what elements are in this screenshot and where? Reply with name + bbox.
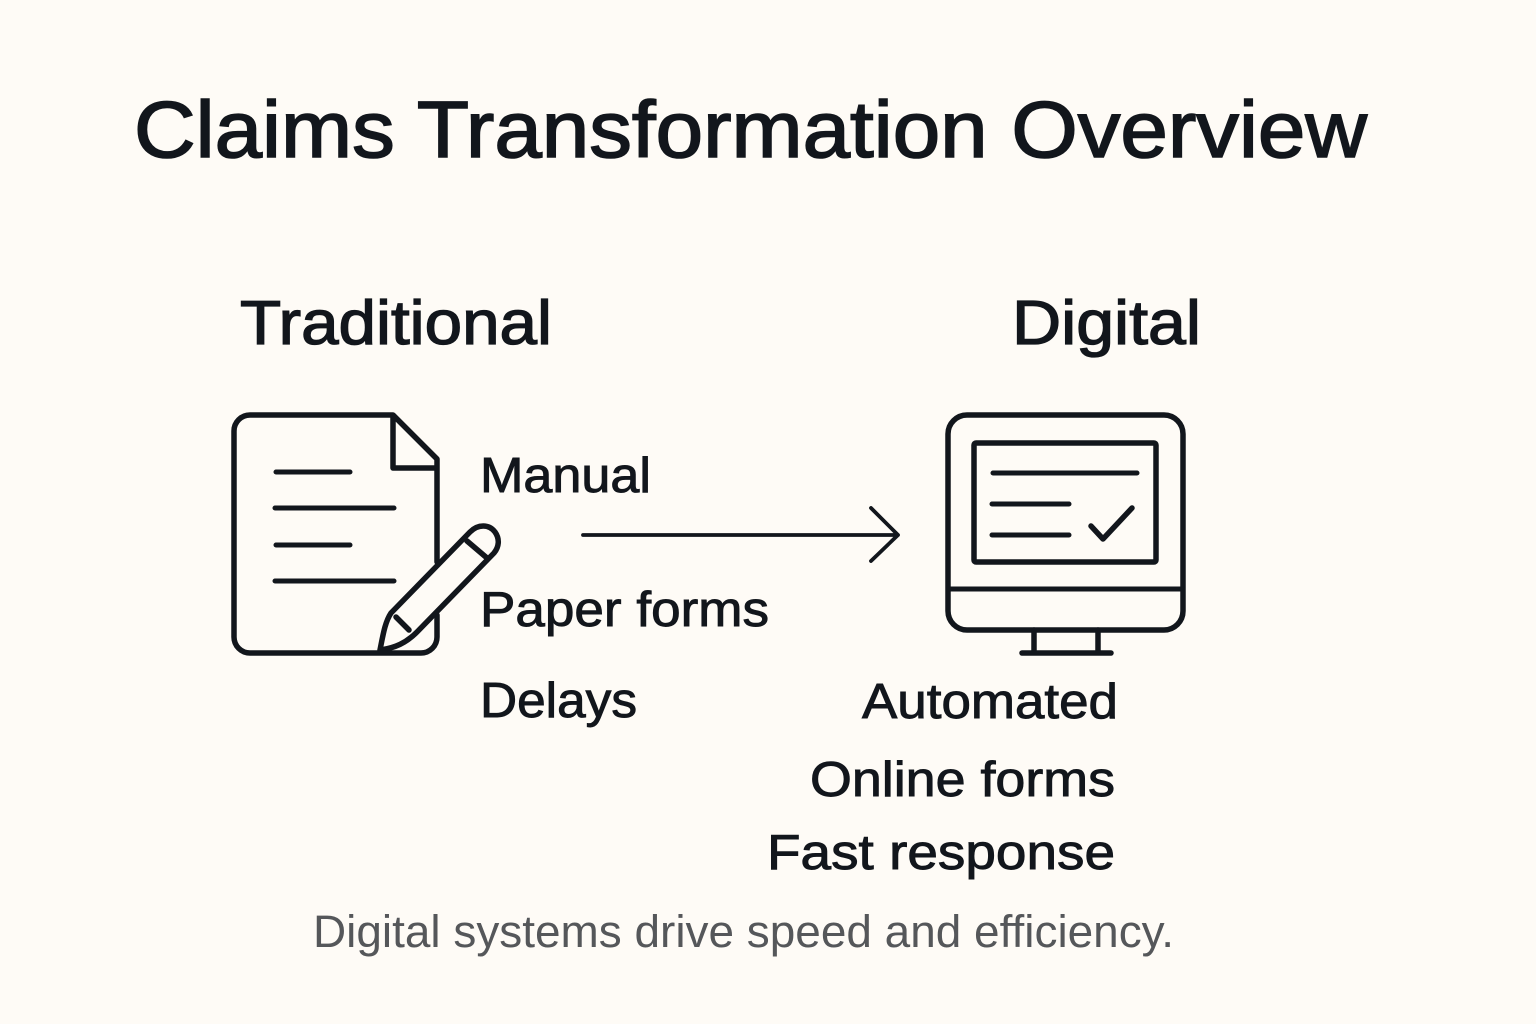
heading: digital: Digital: [1012, 289, 1201, 358]
traditional list: [480, 449, 769, 728]
label: automated: Automated: [862, 675, 1118, 729]
caption: Digital systems drive speed and efficiency.: [313, 906, 1174, 957]
label: manual: Manual: [480, 449, 651, 503]
label: online forms: Online forms: [810, 753, 1115, 807]
label: fast response: Fast response: [767, 826, 1115, 880]
heading: traditional: Traditional: [240, 289, 552, 358]
title: Claims Transformation Overview: [134, 85, 1367, 174]
label: delays: Delays: [480, 674, 637, 728]
arrow: traditional to digital: [583, 508, 898, 561]
icon: computer monitor with checklist: [948, 415, 1183, 653]
digital list: [767, 675, 1118, 880]
icon: paper document with pencil: [234, 415, 498, 653]
label: paper forms: Paper forms: [480, 583, 769, 637]
